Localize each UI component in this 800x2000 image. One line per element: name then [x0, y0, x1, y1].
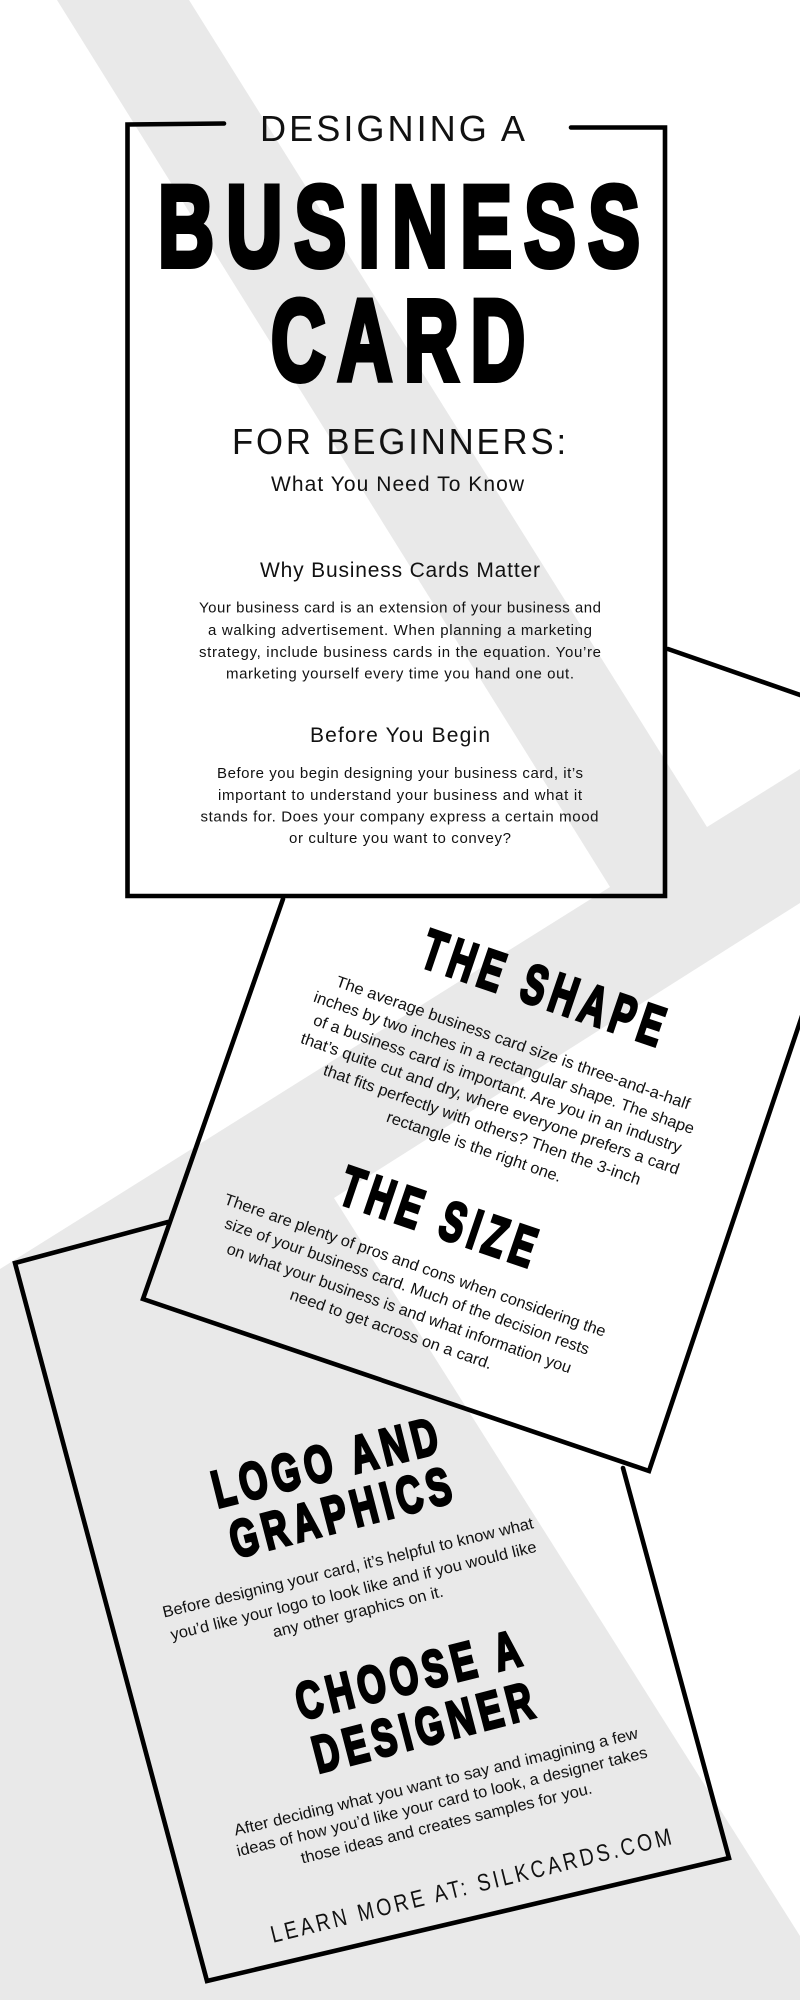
text block: before you begin: Before you begin designing your business card, it’s — [217, 765, 583, 782]
text block: the size: need to get across on a card. — [288, 1287, 494, 1373]
heading: why business cards matter: Why Business Cards Matter — [260, 559, 540, 582]
frame outline — [128, 124, 665, 896]
heading: choose a designer: DESIGNER — [307, 1671, 545, 1785]
heading: the size: THE SIZE — [332, 1154, 550, 1281]
text block: the shape: rectangle is the right one. — [384, 1109, 563, 1186]
heading: before you begin: Before You Begin — [310, 724, 490, 747]
title: CARD — [271, 277, 537, 405]
title: FOR BEGINNERS: — [232, 421, 569, 462]
text block: the shape: inches by two inches in a rectangular shape. The shape — [311, 989, 696, 1138]
text block: the shape: that’s quite cut and dry, where everyone prefers a card — [298, 1030, 681, 1179]
heading: logo and graphics — [206, 1406, 463, 1570]
text block: why business cards matter — [199, 600, 601, 682]
text block: the shape: The average business card size is three-and-a-half — [334, 974, 693, 1113]
text block: logo and graphics: Before designing your card, it’s helpful to know what — [161, 1515, 536, 1622]
text block: choose a designer: After deciding what you want to say and imagining a few — [232, 1725, 640, 1840]
panel: third card — [15, 1222, 729, 1981]
text block: before you begin — [200, 765, 598, 847]
text block: before you begin: important to understand your business and what it — [218, 787, 583, 804]
text block: the size: There are plenty of pros and cons when considering the — [222, 1191, 608, 1341]
text block: the shape — [298, 974, 696, 1189]
title — [158, 108, 652, 496]
heading: logo and graphics: GRAPHICS — [224, 1456, 463, 1570]
panel: title card frame — [128, 108, 665, 896]
text block: why business cards matter: Your business card is an extension of your business and — [199, 600, 601, 616]
card outline — [143, 649, 800, 1471]
heading: choose a designer: CHOOSE A — [290, 1619, 532, 1732]
text block: the size: on what your business is and what information you — [224, 1241, 573, 1377]
text block: choose a designer: ideas of how you’d like your card to look, a designer takes — [235, 1745, 649, 1860]
text block: before you begin: stands for. Does your company express a certain mood — [200, 808, 598, 826]
title: What You Need To Know — [271, 473, 525, 496]
text block: choose a designer: those ideas and creates samples for you. — [299, 1781, 594, 1867]
panel: second card — [143, 649, 800, 1471]
text block: logo and graphics: any other graphics on it. — [271, 1584, 445, 1641]
heading: choose a designer — [290, 1619, 545, 1785]
text block: the shape: that fits perfectly with others? Then the 3-inch — [321, 1062, 643, 1189]
heading: logo and graphics: LOGO AND — [206, 1406, 449, 1519]
text block: the size: size of your business card. Much of the decision rests — [222, 1215, 591, 1359]
text block: why business cards matter: strategy, include business cards in the equation. You’re — [199, 644, 601, 661]
card outline — [15, 1222, 729, 1981]
call to action: LEARN MORE AT: SILKCARDS.COM — [268, 1823, 677, 1949]
text block: before you begin: or culture you want to convey? — [289, 830, 511, 847]
text block: why business cards matter: a walking advertisement. When planning a marketing — [208, 622, 592, 639]
text block: logo and graphics: you’d like your logo to look like and if you would like — [169, 1539, 538, 1644]
text block: the shape: of a business card is important. Are you in an industry — [311, 1012, 684, 1157]
title: DESIGNING A — [260, 108, 528, 149]
text block: why business cards matter: marketing yourself every time you hand one out. — [226, 666, 574, 682]
